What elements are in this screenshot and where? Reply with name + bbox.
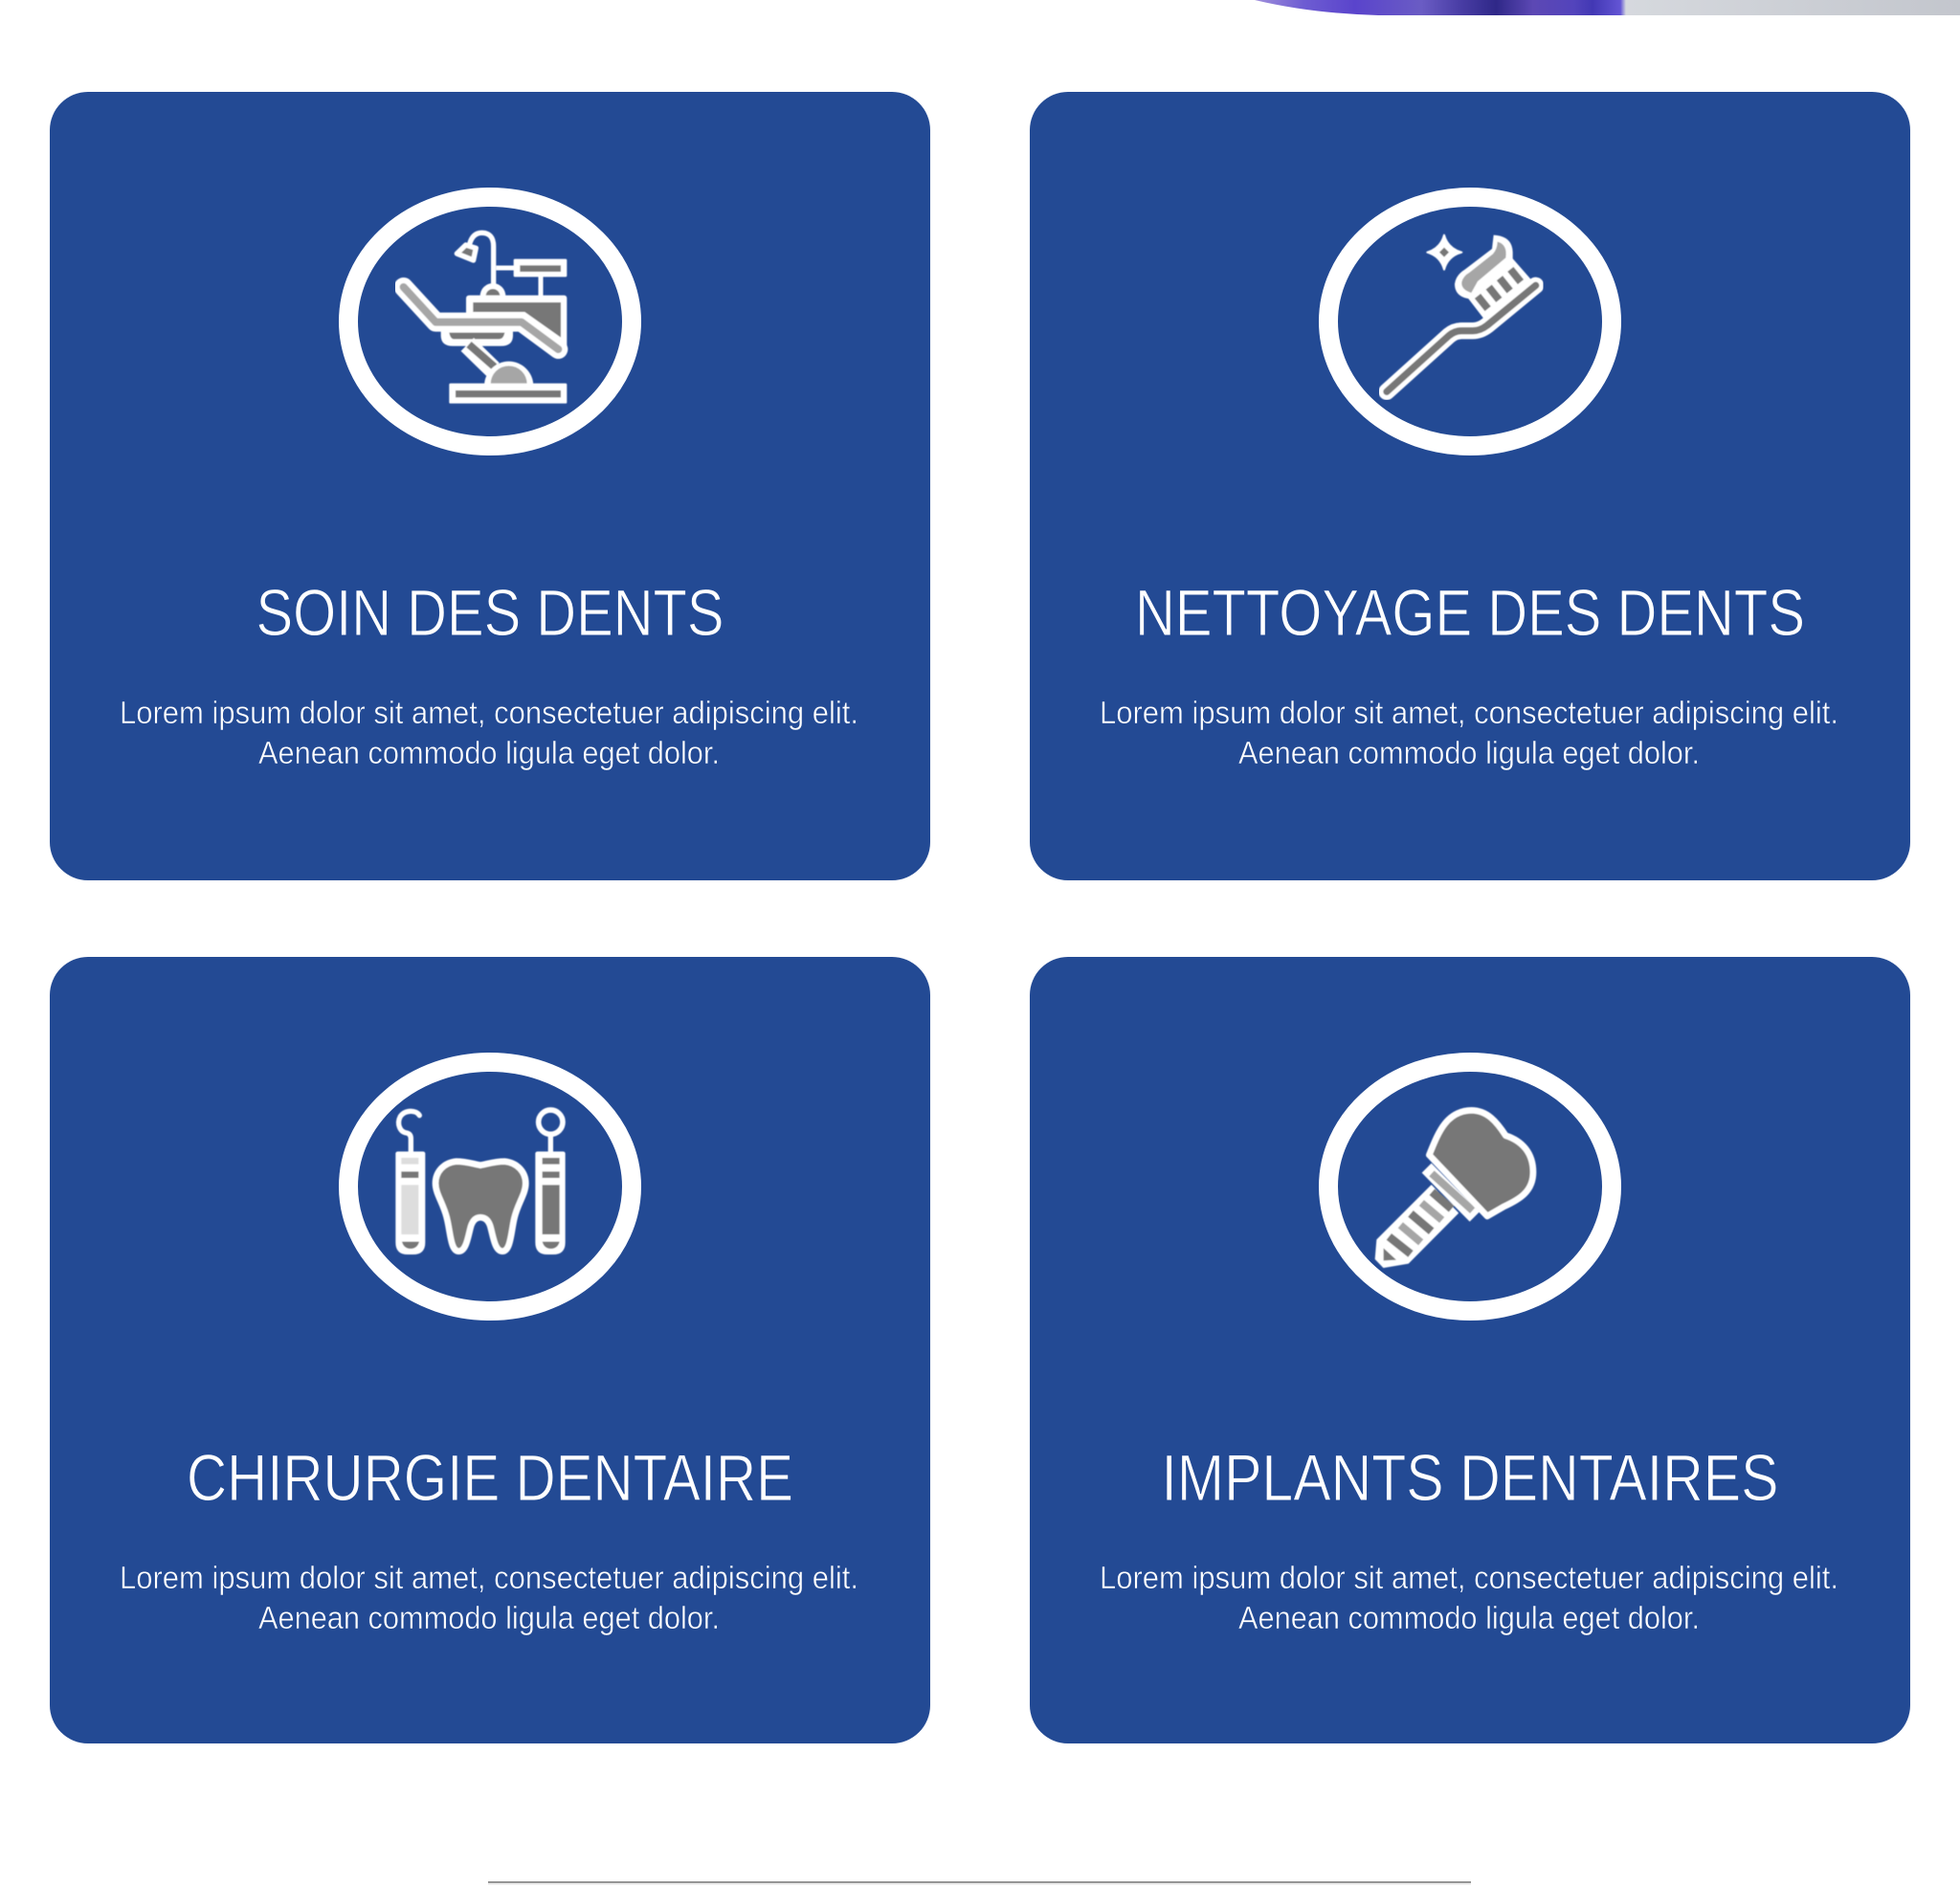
icon: dental implant [1328,1062,1612,1311]
heading: IMPLANTS DENTAIRES [1162,1441,1778,1515]
text block: Lorem ipsum dolor sit amet, consectetuer adipiscing elit. [1100,1560,1838,1595]
icon: toothbrush [1328,197,1612,446]
heading: CHIRURGIE DENTAIRE [187,1441,793,1515]
bottom rule [488,1881,1471,1885]
panel: chirurgie dentaire [50,957,930,1743]
text block [120,695,858,770]
icon: dental tools and tooth [348,1062,632,1311]
text block: Lorem ipsum dolor sit amet, consectetuer adipiscing elit. [120,695,858,730]
text block [1100,1560,1838,1635]
text block: Aenean commodo ligula eget dolor. [258,735,720,770]
text block [1100,695,1838,770]
panel: nettoyage des dents [1030,92,1910,880]
text block: Lorem ipsum dolor sit amet, consectetuer adipiscing elit. [120,1560,858,1595]
text block: Aenean commodo ligula eget dolor. [258,1600,720,1635]
icon: dental chair [348,197,632,446]
heading: SOIN DES DENTS [256,576,724,650]
heading: NETTOYAGE DES DENTS [1135,576,1805,650]
text block: Aenean commodo ligula eget dolor. [1238,1600,1700,1635]
text block [120,1560,858,1635]
panel: soin des dents [50,92,930,880]
panel: implants dentaires [1030,957,1910,1743]
text block: Aenean commodo ligula eget dolor. [1238,735,1700,770]
top banner fragment [1255,0,1960,15]
text block: Lorem ipsum dolor sit amet, consectetuer adipiscing elit. [1100,695,1838,730]
